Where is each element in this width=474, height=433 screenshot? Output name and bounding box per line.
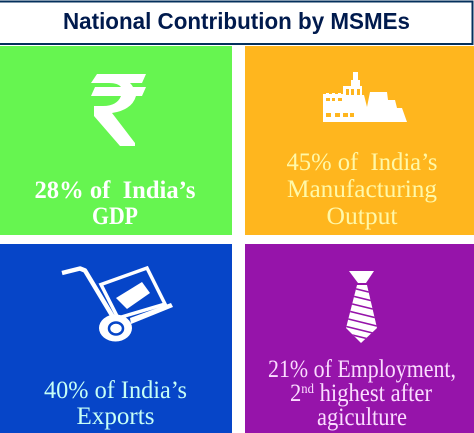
text: manufacturing share <box>286 149 438 230</box>
text: employment share <box>268 356 456 431</box>
panel: GDP <box>0 46 232 235</box>
text: exports share: 40% of India’s <box>44 377 187 404</box>
text: exports share: Exports <box>76 403 154 430</box>
text: employment share: nd <box>301 382 314 397</box>
text: GDP share: GDP <box>92 203 138 230</box>
text: manufacturing share: Output <box>326 203 398 230</box>
icon: hand truck <box>62 268 173 342</box>
icon: necktie <box>346 271 377 343</box>
icon: factory <box>323 72 407 122</box>
text: GDP share: 28% of India’s <box>34 177 196 204</box>
panel: employment <box>245 244 474 433</box>
text: employment share: 2 <box>290 380 302 407</box>
text: exports share <box>44 377 187 430</box>
icon: rupee <box>91 74 146 146</box>
panel: exports <box>0 244 232 433</box>
title banner: National Contribution by MSMEs <box>63 8 410 34</box>
text: manufacturing share: Manufacturing <box>287 176 438 203</box>
text: manufacturing share: 45% of India’s <box>286 149 438 176</box>
text: employment share: agiculture <box>317 404 407 431</box>
text: employment share: highest after <box>314 380 433 407</box>
panel: manufacturing <box>245 46 474 235</box>
text: GDP share <box>34 177 196 230</box>
title banner <box>0 2 472 44</box>
